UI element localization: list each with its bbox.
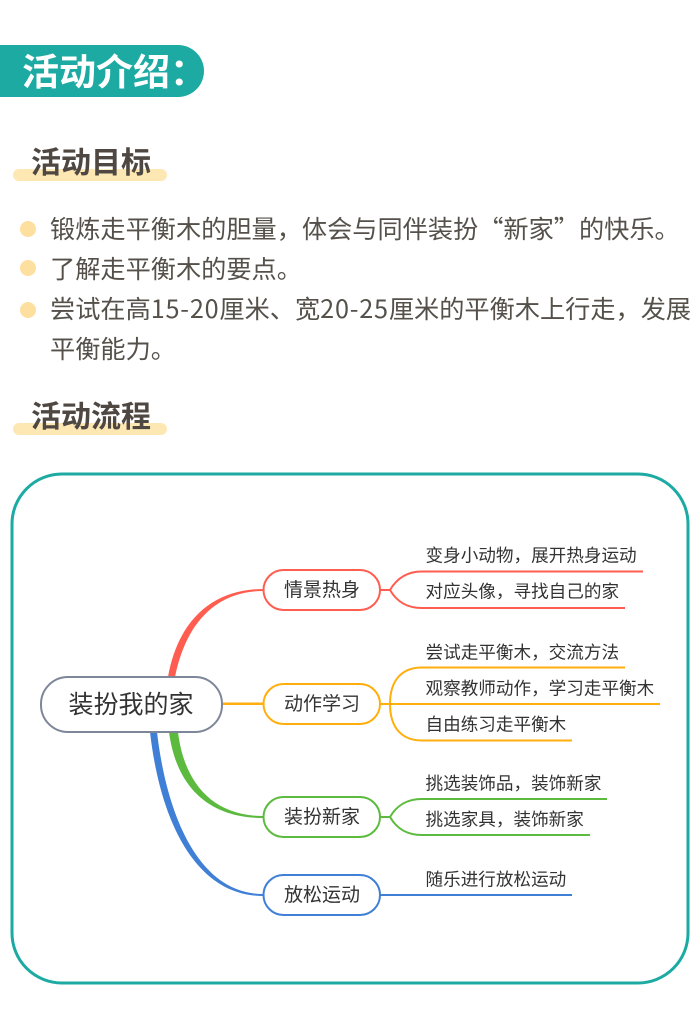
leaf texts: 挑选家具，装饰新家 bbox=[426, 806, 584, 832]
bullet 3 bbox=[20, 290, 691, 366]
leaf texts: 自由练习走平衡木 bbox=[426, 712, 567, 736]
node: 情景热身 bbox=[264, 570, 380, 610]
panel: mind map bbox=[12, 474, 688, 983]
branch: green bbox=[169, 732, 607, 837]
branch: red bbox=[168, 542, 643, 677]
leaf texts bbox=[426, 542, 637, 604]
leaf texts bbox=[426, 770, 601, 832]
node: 装扮新家: 装扮新家 bbox=[284, 802, 360, 829]
node: 动作学习: 动作学习 bbox=[284, 689, 360, 716]
node: 情景热身: 情景热身 bbox=[284, 575, 360, 602]
node: 放松运动 bbox=[264, 875, 380, 915]
bullet 1: 锻炼走平衡木的胆量，体会与同伴装扮“新家”的快乐。 bbox=[50, 210, 680, 246]
leaf text: 随乐进行放松运动 bbox=[426, 866, 566, 892]
central node: 装扮我的家: 装扮我的家 bbox=[68, 685, 194, 721]
goals list bbox=[20, 210, 691, 366]
leaf texts: 变身小动物，展开热身运动 bbox=[426, 542, 637, 568]
branch: blue bbox=[150, 732, 572, 915]
bullet 2: 了解走平衡木的要点。 bbox=[50, 250, 302, 286]
leaf texts: 观察教师动作，学习走平衡木 bbox=[426, 676, 655, 700]
node: 动作学习 bbox=[264, 684, 380, 724]
central node: 装扮我的家 bbox=[41, 677, 222, 732]
leaf texts bbox=[426, 640, 655, 736]
leaf texts: 挑选装饰品，装饰新家 bbox=[426, 770, 601, 796]
branch: orange bbox=[222, 640, 660, 740]
node: 放松运动: 放松运动 bbox=[284, 880, 360, 907]
node: 装扮新家 bbox=[264, 797, 380, 837]
bullet 3: 平衡能力。 bbox=[50, 330, 176, 366]
leaf texts: 对应头像，寻找自己的家 bbox=[426, 578, 619, 604]
section banner: 活动介绍: 活动介绍： bbox=[22, 42, 207, 96]
leaf texts: 尝试走平衡木，交流方法 bbox=[426, 640, 619, 664]
heading: 活动目标: 活动目标 bbox=[31, 138, 151, 182]
heading: 活动流程: 活动流程 bbox=[31, 392, 151, 436]
bullet 3: 尝试在高15-20厘米、宽20-25厘米的平衡木上行走，发展 bbox=[50, 290, 691, 326]
